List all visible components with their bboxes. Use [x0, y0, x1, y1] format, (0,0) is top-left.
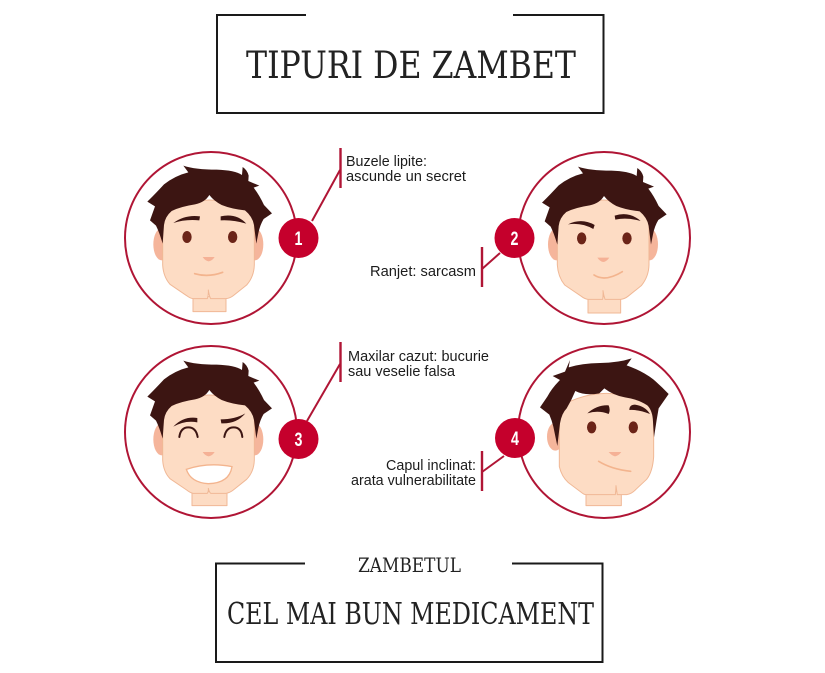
- title frame: [217, 15, 604, 113]
- ring 1: [125, 152, 297, 324]
- ring 3: [125, 346, 297, 518]
- caption 3: sau veselie falsa: [348, 363, 456, 380]
- badge 1: 1: [295, 228, 302, 250]
- panel: smile 3: [125, 342, 489, 518]
- panel: smile 2: [370, 152, 690, 324]
- badge 2: 2: [511, 228, 518, 250]
- bar 2: [481, 247, 483, 287]
- panel: smile 4: [351, 346, 690, 518]
- bar 4: [481, 451, 483, 491]
- caption 2: Ranjet: sarcasm: [370, 263, 476, 280]
- title: TIPURI DE ZAMBET: [246, 44, 576, 87]
- face 4: [540, 358, 669, 506]
- connector 3: [307, 364, 340, 421]
- panel: smile 1: [125, 148, 467, 324]
- badge 2: [494, 218, 534, 258]
- badge 3: 3: [295, 429, 302, 451]
- badge 1: [278, 218, 318, 258]
- caption 1: Buzele lipite:: [346, 153, 427, 170]
- bottom heading: CEL MAI BUN MEDICAMENT: [227, 597, 594, 632]
- ring 2: [518, 152, 690, 324]
- badge 3: [278, 419, 318, 459]
- face 3: [147, 361, 272, 506]
- bar 1: [339, 148, 342, 188]
- caption 1: ascunde un secret: [346, 168, 467, 185]
- connector 1: [312, 170, 340, 221]
- badge 4: [495, 418, 535, 458]
- bar 3: [339, 342, 342, 382]
- caption 4: arata vulnerabilitate: [351, 472, 476, 489]
- bottom frame: [216, 564, 602, 662]
- caption 4: Capul inclinat:: [386, 457, 476, 474]
- badge 4: 4: [511, 428, 520, 450]
- connector 2: [482, 253, 500, 269]
- face 1: [147, 166, 272, 312]
- connector 4: [482, 456, 504, 472]
- face 2: [542, 167, 667, 313]
- ring 4: [518, 346, 690, 518]
- caption 3: Maxilar cazut: bucurie: [348, 348, 489, 365]
- bottom kicker: ZAMBETUL: [358, 553, 461, 577]
